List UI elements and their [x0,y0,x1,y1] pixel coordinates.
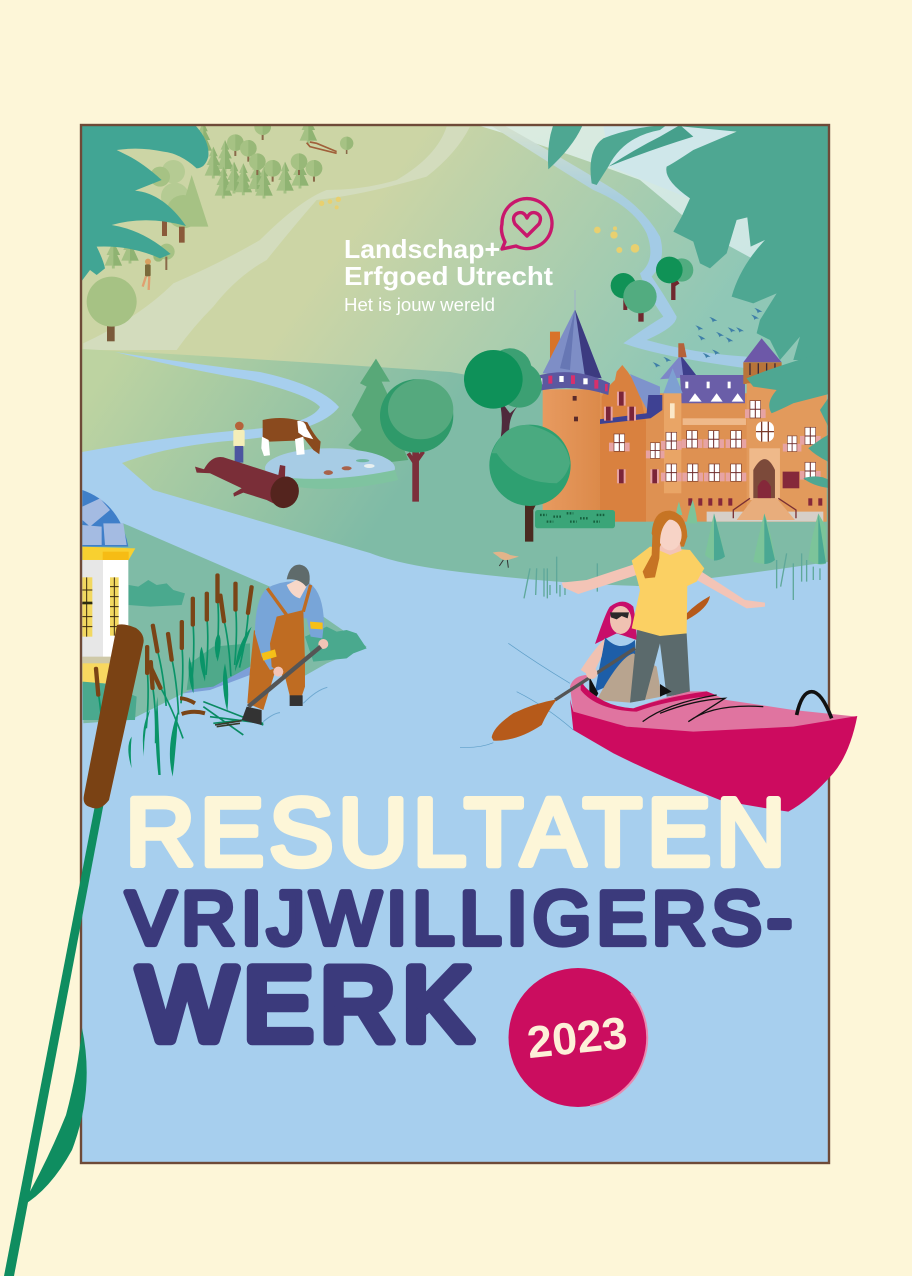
purple roof [680,375,745,403]
title: VRIJWILLIGERS-: VRIJWILLIGERS- [126,876,792,960]
kayak hull [570,699,857,812]
deck bungee lines [643,695,763,722]
face [610,606,631,634]
title: WERK: WERK [138,947,472,1063]
far hill [82,126,828,400]
castle [534,290,827,522]
pond [265,448,398,489]
top-left foliage [80,123,208,283]
bank bushes [83,580,367,720]
wall [82,560,128,683]
ground arches [688,472,822,506]
hands [273,639,328,677]
boy [233,422,245,463]
round tower [543,389,600,513]
gothic window [756,422,774,442]
reeds at bank right [524,553,820,600]
windows [604,392,821,483]
illustrated landscape scene [80,112,832,1163]
cockpit [589,677,672,697]
hair back [652,511,687,547]
reeds and cattails [94,573,327,777]
head [287,565,310,598]
balcony band [683,418,746,425]
walker [143,259,151,290]
meadow [82,349,828,586]
year badge [508,968,648,1107]
arms [562,564,765,608]
meadow scene: pine, tree, pond, log, cow, boy [195,359,453,512]
near leg and boot [242,630,277,725]
trees behind foliage [162,160,185,183]
conifers on lawn [676,500,826,564]
forest on hill [87,112,353,341]
yellow flowers [319,197,341,209]
slate roof [630,374,660,410]
tree group [611,273,657,322]
kayak group [492,511,857,812]
left gable [602,365,646,422]
trousers [630,628,690,703]
logo wordmark: Landschap+ [344,234,500,264]
hair strand [643,518,669,578]
leaves [548,125,583,169]
castle main mass [600,393,827,522]
frame border [81,125,829,1163]
tree [380,379,453,502]
legs [597,653,662,703]
lower leaves [747,350,832,413]
logo icon: heart speech bubble [501,199,552,249]
blue top [595,637,635,692]
right-hill trees and birds [594,226,762,368]
blue shirt [255,581,324,670]
tower chimney [550,332,560,358]
far paddle blade [687,596,710,620]
volunteer with rake [242,565,328,725]
flowers on right hill [594,226,639,253]
hair back [595,602,637,644]
hedge [535,510,615,528]
title: RESULTATEN: RESULTATEN [126,779,786,886]
right wing [747,383,827,522]
yellow shirt [632,547,704,636]
castle entrance [749,448,780,500]
seated woman's hand [586,668,597,679]
central spire [660,357,696,380]
cut reeds [180,698,263,735]
ripple lines [460,643,573,747]
big round tree [489,425,571,542]
castle-front trees [464,348,615,542]
neck and face [658,543,682,555]
steps on hill [307,142,337,153]
shore bird [493,552,519,568]
foreground cattail [4,624,144,1276]
logo [344,199,553,315]
kayak deck [570,675,857,735]
arm [581,638,605,677]
statue on spire [678,343,687,357]
dormers [685,382,744,402]
dark green tree [464,348,542,438]
yellow armbands [261,622,323,661]
central turret [664,393,681,493]
arched windows [82,577,119,637]
logo tagline: Het is jouw wereld [344,295,495,315]
top-right foliage [548,125,832,488]
far river [490,125,747,368]
fallen log [195,457,299,508]
dome [82,490,128,547]
paddle [492,648,635,741]
cattail stem [4,800,104,1276]
year text: 2023 [525,1007,629,1068]
black handle [797,692,832,718]
cattail leaf [22,1028,87,1206]
seated woman [581,602,662,703]
round tree bottom-left [87,277,137,341]
cockpit rim [581,682,717,712]
stairs [707,498,823,522]
main canopy [666,125,832,360]
hillside path [83,127,470,350]
pale sky gap [603,125,737,200]
tower roof [543,309,602,378]
far leg and boot [283,657,305,706]
overall bib [270,610,305,677]
right tower roof [743,338,782,362]
rake handle [248,647,321,707]
cornice [82,547,135,560]
pine tree [348,359,408,463]
lower left bank [82,523,367,723]
cow [261,418,321,456]
tree [656,257,693,300]
sunglasses [610,612,629,619]
water [82,352,828,1163]
sky [480,126,765,258]
tower collar with shields [534,372,610,395]
standing woman [562,511,765,703]
logo: Erfgoed Utrecht [344,261,553,291]
cattail head [84,624,144,808]
pavilion [82,490,135,683]
flock of birds [653,308,762,368]
water ripples [263,687,327,722]
